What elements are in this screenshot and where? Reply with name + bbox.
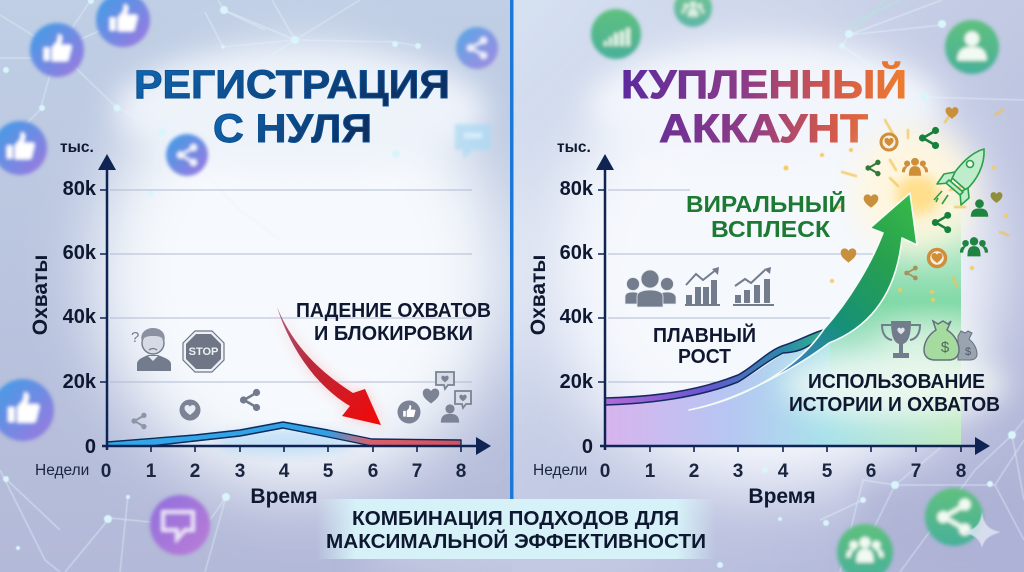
banner: combined approach [316,499,716,559]
icon: growth chart outline [733,267,774,305]
y labels: 20k [560,371,594,393]
icon: share small [131,413,147,429]
x labels: Время [250,485,318,508]
sparkle star [963,512,1001,548]
x labels: Недели [533,462,587,479]
axes [98,154,491,455]
chart area [605,195,1007,446]
arrow: viral growth [689,193,917,410]
y labels: 80k [560,178,594,200]
chart: purchased account [527,139,1007,508]
burst glow [784,108,1008,302]
x labels: 8 [456,461,466,482]
icon: trophy [882,321,920,358]
y labels: тыс. [60,139,94,156]
icon: heart badge [180,400,200,420]
icon: stop sign [183,331,224,372]
y labels: 0 [85,436,96,458]
x labels: 0 [600,461,610,482]
x labels: 7 [412,461,422,482]
icon: user [441,404,459,423]
title: right: АККАУНТ [659,107,868,151]
x labels: 3 [235,461,245,482]
icon: heart comment [436,372,454,389]
y labels: 40k [63,306,97,328]
x labels: 2 [190,461,200,482]
icon: heart [423,388,439,404]
callout: falling reach: И БЛОКИРОВКИ [314,323,473,345]
icon: confused user [131,328,171,371]
x labels [533,461,966,508]
x labels: 2 [689,461,699,482]
callout: viral surge: ВСПЛЕСК [711,216,831,242]
x labels: 4 [778,461,789,482]
reach line [107,422,461,446]
x labels: 6 [368,461,378,482]
viral icons [841,107,1002,280]
x labels: 5 [323,461,334,482]
callout: viral surge: ВИРАЛЬНЫЙ [686,190,846,217]
arrow: red decline [277,307,381,425]
icon: money bags: $ [965,346,971,358]
y labels: Охваты [29,255,52,335]
x labels: 4 [279,461,290,482]
title: left: С НУЛЯ [213,107,372,151]
y labels: 60k [63,242,97,264]
callout: falling reach [296,300,491,345]
icon: stop sign: STOP [189,346,218,358]
y labels: 20k [63,371,97,393]
x labels: 1 [146,461,157,482]
label: use of history: ИСТОРИИ И ОХВАТОВ [789,394,1000,416]
x labels: Недели [35,462,89,479]
callout: falling reach: ПАДЕНИЕ ОХВАТОВ [296,300,491,322]
icon: group of people [625,270,676,307]
title: right: КУПЛЕННЫЙ [621,61,907,107]
label: smooth growth: РОСТ [678,346,731,368]
x labels: 1 [645,461,656,482]
label: smooth growth [653,323,756,368]
x labels: 7 [911,461,921,482]
growth line [605,329,826,405]
label: use of history: ИСПОЛЬЗОВАНИЕ [808,371,985,393]
x labels: 5 [822,461,833,482]
title: left: РЕГИСТРАЦИЯ [134,63,450,107]
y labels: 0 [582,436,593,458]
y labels: 80k [63,178,97,200]
y labels [527,139,594,458]
label: use of history [789,371,1000,416]
y labels: Охваты [527,255,550,335]
icon: share [240,389,260,411]
axes [596,154,990,455]
y labels [29,139,97,458]
icon: growth chart [685,267,720,305]
x labels: 3 [733,461,743,482]
title: left [134,63,450,151]
chart: registration from scratch [29,139,491,508]
x labels: 0 [101,461,111,482]
banner: combined approach: КОМБИНАЦИЯ ПОДХОДОВ ДЛЯ [352,508,679,530]
blurred social icons: right [591,0,999,572]
y labels: тыс. [557,139,591,156]
icon: money bags: $ [941,339,950,356]
banner: combined approach: МАКСИМАЛЬНОЙ ЭФФЕКТИВНОСТИ [326,529,706,553]
blurred social icons: left [0,0,498,555]
divider [510,0,514,500]
label: smooth growth: ПЛАВНЫЙ [653,323,756,347]
icon: heart comment two [455,391,471,408]
x labels: Время [748,485,816,508]
x labels [35,461,466,508]
icon: like badge [398,400,420,424]
y labels: 40k [560,306,594,328]
icon: confused user: ? [131,329,139,346]
title: right [621,61,907,151]
icon: money bags [924,321,977,360]
x labels: 6 [866,461,876,482]
y labels: 60k [560,242,594,264]
icon: rocket [934,149,984,205]
callout: viral surge [686,190,846,242]
x labels: 8 [956,461,966,482]
